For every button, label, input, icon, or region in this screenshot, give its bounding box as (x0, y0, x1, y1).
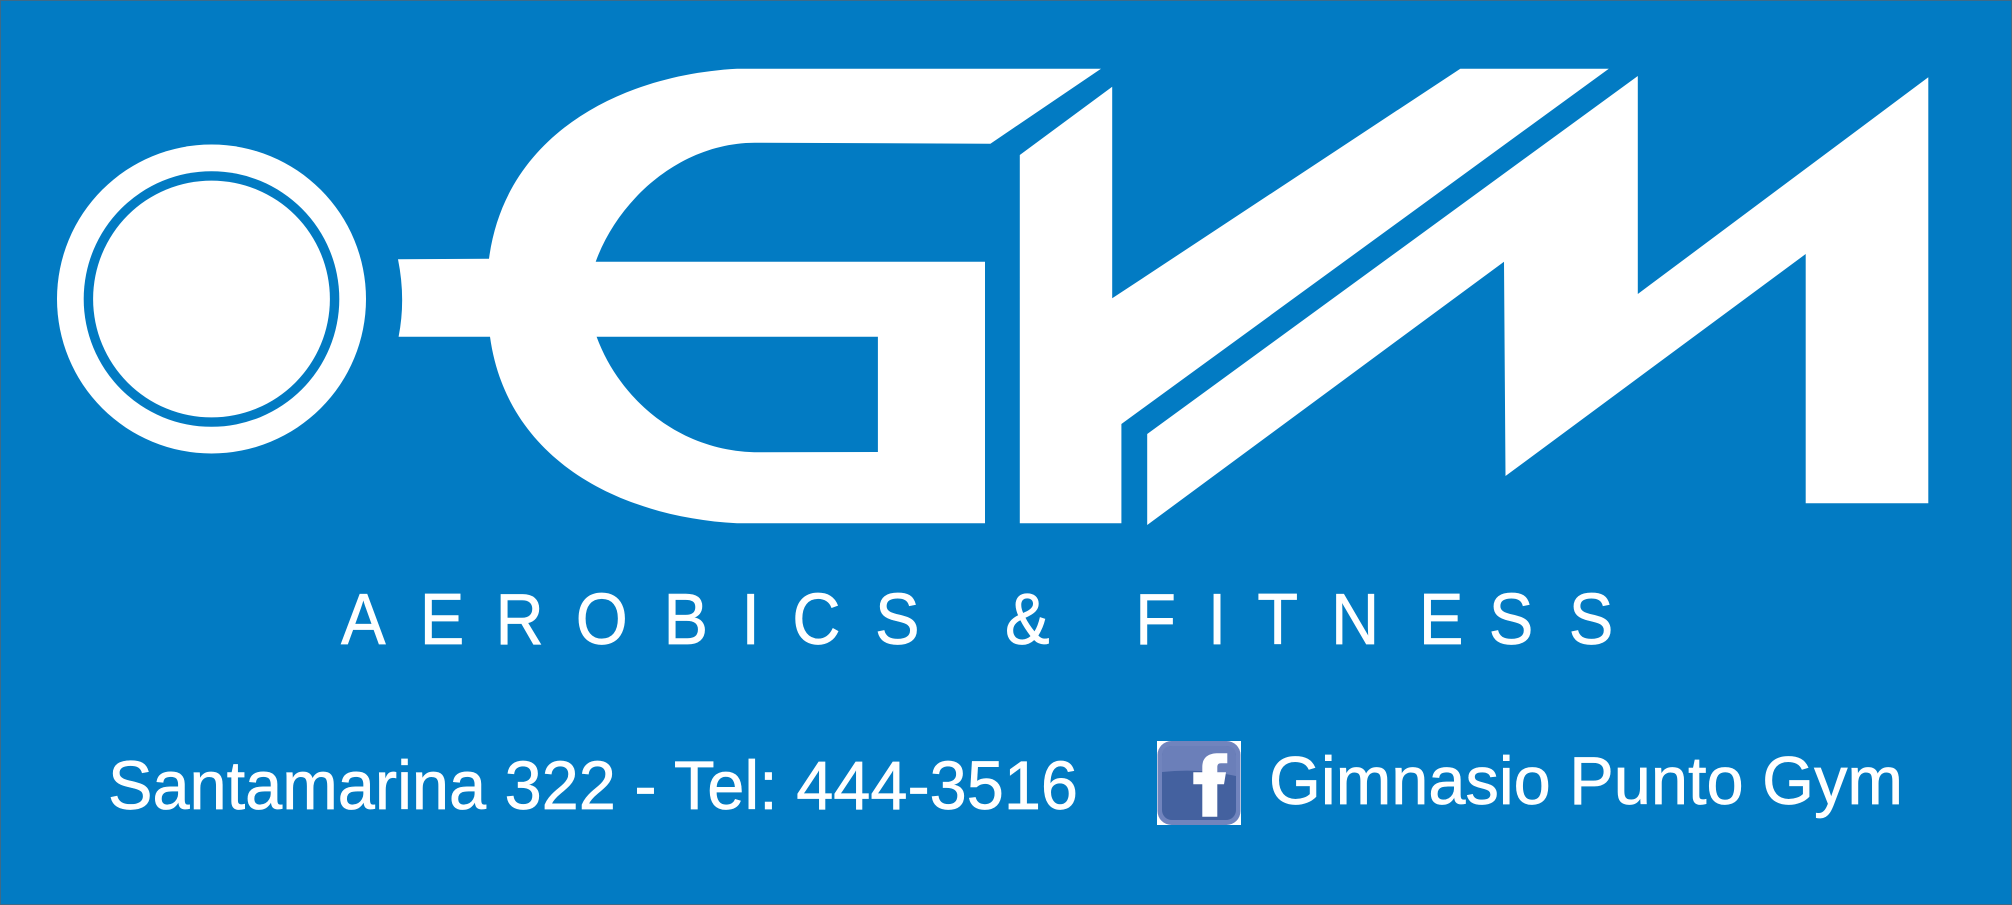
Facebook page name: Gimnasio Punto Gym (1269, 743, 1903, 819)
logo letter: G with connecting bar (398, 69, 1101, 523)
tagline: Aerobics & Fitness: AEROBICS & FITNESS (341, 578, 1613, 660)
logo letter: M (1147, 76, 1928, 525)
icon: Facebook (1157, 741, 1241, 825)
address and telephone: Santamarina 322 - Tel: 444-3516 (108, 747, 1078, 824)
logo: O-GYM (57, 69, 1928, 525)
logo ring: the dot of Punto (57, 144, 366, 454)
logo letter: Y (1020, 69, 1609, 523)
